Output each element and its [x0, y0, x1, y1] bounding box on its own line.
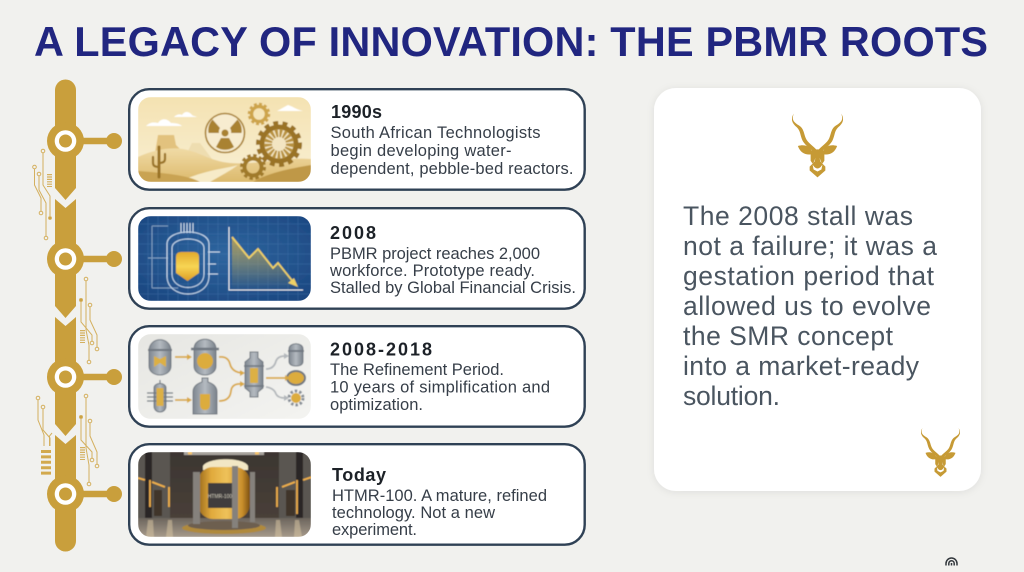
card: 2008	[129, 208, 585, 309]
description	[332, 487, 547, 539]
spine segment 2008-2018	[55, 317, 76, 436]
quote text: not a failure; it was a	[683, 231, 937, 261]
illustration: HTMR-100 reactor in hall: HTMR-100	[208, 494, 232, 500]
quote text: into a market-ready	[683, 351, 920, 381]
description	[330, 361, 550, 414]
description	[329, 245, 576, 297]
quote text: the SMR concept	[683, 321, 894, 351]
description: South African Technologists	[330, 124, 540, 142]
description: experiment.	[332, 521, 417, 539]
description: PBMR project reaches 2,000	[330, 245, 540, 263]
description: Stalled by Global Financial Crisis.	[330, 279, 576, 297]
card: 1990s	[129, 89, 585, 190]
illustration: desert, radiation symbol and gears	[138, 97, 311, 182]
heading: 1990s	[331, 102, 382, 122]
description: begin developing water-	[330, 142, 512, 160]
description: HTMR-100. A mature, refined	[332, 487, 547, 505]
card: 2008-2018	[129, 326, 585, 427]
quote text: allowed us to evolve	[683, 291, 931, 321]
quote text: The 2008 stall was	[683, 201, 913, 231]
description: 10 years of simplification and	[330, 378, 550, 396]
heading: 2008	[330, 223, 376, 243]
spine segment 2008	[55, 199, 76, 318]
illustration: HTMR-100 reactor in hall	[138, 452, 312, 537]
icon: kudu logo bottom	[921, 428, 960, 477]
node 2008	[47, 240, 122, 278]
node 1990s	[47, 122, 122, 160]
icon: kudu logo top	[792, 114, 843, 177]
description: technology. Not a new	[332, 504, 495, 522]
panel: key message	[654, 88, 981, 491]
description: The Refinement Period.	[330, 361, 504, 379]
title: A LEGACY OF INNOVATION: THE PBMR ROOTS	[34, 19, 988, 65]
description: optimization.	[330, 396, 423, 414]
timeline spine	[47, 80, 122, 552]
node 2008-2018	[47, 358, 122, 396]
heading: Today	[332, 465, 386, 485]
description: workforce. Prototype ready.	[329, 262, 535, 280]
card: today	[129, 444, 585, 545]
node today	[47, 476, 122, 512]
quote text: gestation period that	[683, 261, 935, 291]
description: dependent, pebble-bed reactors.	[330, 160, 574, 178]
circuit trace decorations	[33, 149, 99, 486]
description	[330, 124, 574, 178]
spine segment today	[55, 435, 76, 552]
spine segment 1990s	[55, 80, 76, 200]
heading: 2008-2018	[330, 340, 432, 360]
illustration: process flow of reactor simplification	[138, 334, 311, 419]
quote text	[683, 201, 937, 411]
illustration: reactor blueprint and falling chart	[138, 216, 311, 301]
quote text: solution.	[683, 381, 780, 411]
icon: footer mark	[946, 558, 957, 566]
